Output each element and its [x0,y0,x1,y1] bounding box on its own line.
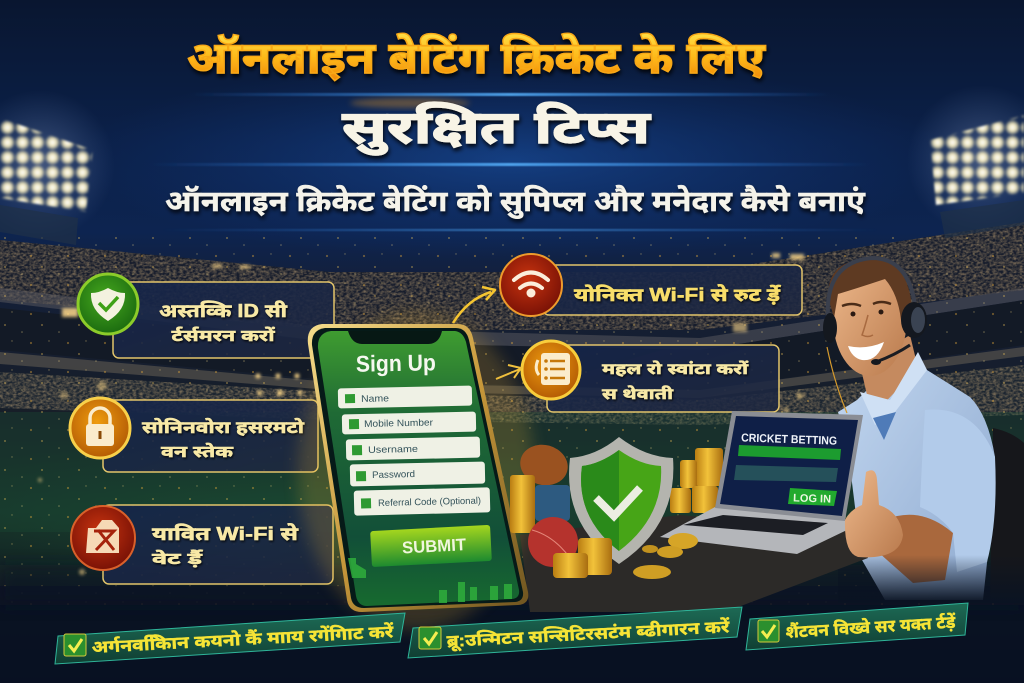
smile [848,342,884,360]
bar: tip one [55,613,405,664]
panel: password tip [70,398,318,472]
text: password line two: वन स्तेक [161,442,234,461]
field: password [350,462,485,486]
arrow to wifi tip [453,287,495,323]
bar: tip two: ब्रू:उन्मिटन सन्सिटिरसटंम ब्ढीगारन करें [446,616,731,653]
text: public wifi: योनिक्त Wi-Fi से रुट र्ड़े [574,284,781,305]
field: username [346,437,480,460]
icon: green shield [78,274,138,334]
laptop green bar [738,445,841,460]
icon: checklist [522,341,580,399]
text: checklist line one: महल रो स्वांटा करों [602,360,749,378]
text: account ID: अस्तव्कि ID सी [159,301,288,321]
icon: wifi [500,254,562,316]
person [823,258,996,600]
laptop screen [720,416,858,516]
cricket ball [528,517,578,567]
forearm [878,515,953,583]
heading: sign up: Sign Up [356,349,436,377]
field: name: Name [361,393,389,405]
field: username: Username [368,444,418,456]
bar: tip three [746,603,968,650]
coin stack left [510,475,535,533]
neck [860,335,918,416]
hair [828,258,912,320]
phone [298,310,534,630]
bottom fade on person [838,555,1024,603]
text: wifi line one: यावित Wi-Fi से [152,524,299,544]
panel: wifi tip left [71,505,333,584]
icon: red no-wifi tag [71,506,135,570]
front coin stacks [553,533,698,579]
laptop info row [734,465,838,482]
glow lines [150,93,880,231]
rolled sleeve [920,410,996,572]
desk [520,515,868,612]
screen chart graphic [348,558,512,603]
chair [990,428,1024,602]
shirt [838,352,995,600]
headset [823,258,927,413]
phone notch [348,331,442,344]
panel: checklist tip right [522,341,779,412]
field: password: Password [372,469,415,481]
bar: tip one: अर्गनवकाििन कयनो कैं मााय रगेंगिाट करें [91,621,395,657]
bar: tip two [408,607,742,658]
security shield [569,437,673,564]
field: referral code: Referral Code (Optional) [378,496,481,509]
thumbs-up hand [845,470,903,557]
coin stack behind laptop [670,448,723,513]
text: checklist line two: स थेवाती [602,385,674,403]
panel: account ID tip [78,274,334,358]
submit button [370,525,492,567]
eyes and brows [842,302,891,336]
text: registration: र्टर्समरन करों [172,326,276,345]
stadium light accents [38,253,804,575]
log in button [788,488,837,506]
stadium floodlight right [907,85,1024,238]
stadium floodlight left [0,90,115,245]
field: referral code [354,487,490,516]
laptop heading: CRICKET BETTING [741,432,837,448]
phone screen [318,331,519,606]
field: name [338,386,472,408]
field: mobile number: Mobile Number [364,417,433,430]
face [833,260,907,376]
text: password line one: सोनिनवोरा हसरमटो [142,417,305,437]
title line 2: सुरक्षित टिप्स [342,101,651,155]
blue chip stack [535,485,570,521]
subtitle: ऑनलाइन क्रिकेट बेटिंग को सुपिप्ल और मनेदार कैसे बनाएं [165,184,866,219]
bar: tip three: शैंटवन विख्वे सर यक्त र्टड़ें [785,612,957,642]
arrow to checklist tip [496,365,521,379]
panel: public wifi tip right [500,254,802,316]
cricket glove [516,439,572,491]
field: mobile number [342,412,476,434]
log in button: LOG IN [793,492,831,506]
submit button: SUBMIT [402,535,467,557]
icon: padlock [70,398,130,458]
collar [860,352,927,425]
title line 1: ऑनलाइन बेटिंग क्रिकेट के लिए [187,32,766,83]
text: wifi line two: वेट र्ड़ै [152,549,204,568]
laptop [660,411,863,554]
